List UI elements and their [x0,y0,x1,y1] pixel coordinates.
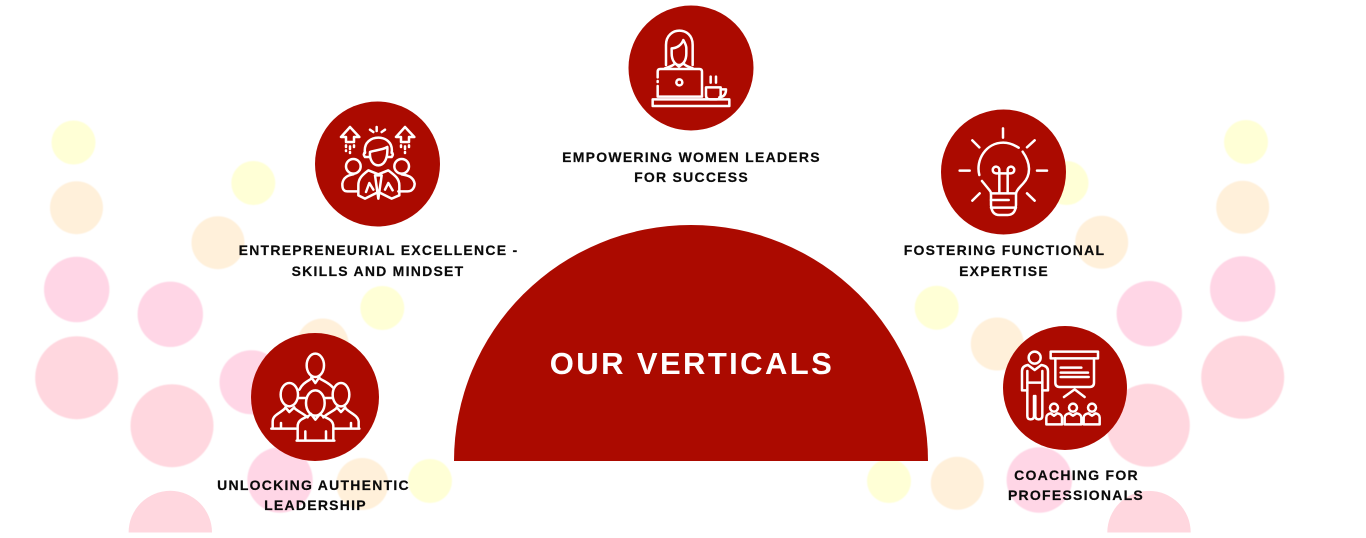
label: LEADERSHIP [264,497,367,513]
background dots: right cluster [867,120,1284,532]
label: EXPERTISE [959,263,1049,279]
label: FOSTERING FUNCTIONAL [904,242,1105,258]
central semicircle with title [454,225,928,461]
label: COACHING FOR [1014,467,1139,483]
icon: presenter and audience [1022,352,1100,424]
label: UNLOCKING AUTHENTIC [217,477,410,493]
label: FOR SUCCESS [634,169,749,185]
icon: entrepreneur team [341,127,415,199]
background dots: left cluster [35,120,452,532]
label: EMPOWERING WOMEN LEADERS [562,149,821,165]
label: ENTREPRENEURIAL EXCELLENCE - [239,242,518,258]
title: OUR VERTICALS [550,346,834,381]
vertical: fostering functional expertise [904,110,1105,279]
label: PROFESSIONALS [1008,487,1144,503]
icon: light bulb [960,128,1047,215]
vertical: unlocking authentic leadership [217,333,410,513]
vertical: coaching for professionals [1003,326,1144,503]
vertical: empowering women leaders [562,6,821,185]
vertical: entrepreneurial excellence [239,102,518,279]
icon: group of leaders [271,354,359,441]
icon: woman at laptop [653,31,729,106]
label: SKILLS AND MINDSET [292,263,464,279]
